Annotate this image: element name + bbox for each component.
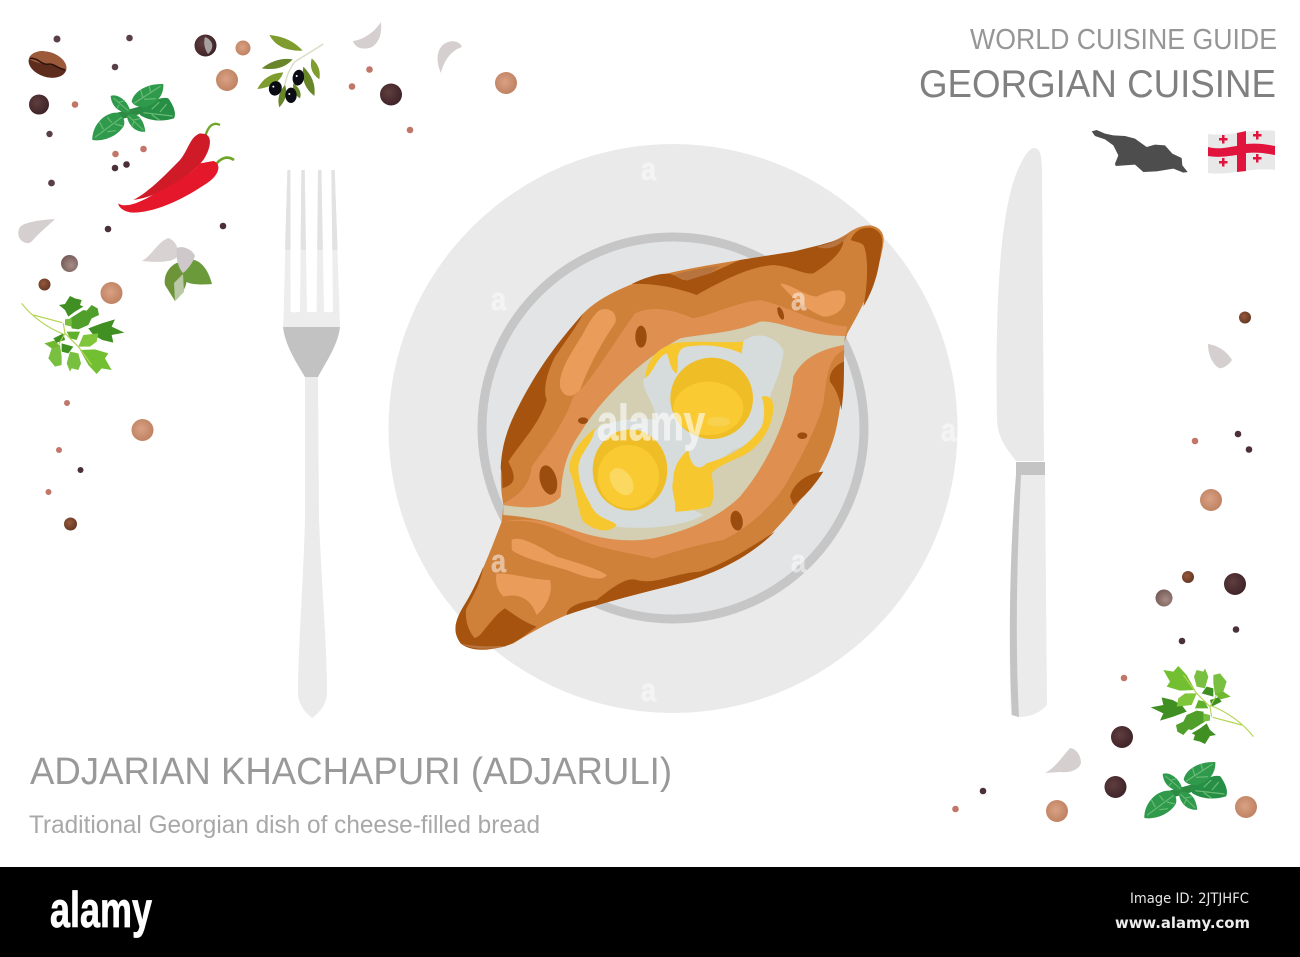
icon: garlic clove, left [18,219,55,243]
website: www.alamy.com [1115,914,1250,932]
highlight patches [496,283,846,615]
guide heading: WORLD CUISINE GUIDE [970,24,1277,56]
map of Georgia [1092,130,1188,173]
icon: chili peppers [118,124,234,213]
flag of Georgia [1208,130,1275,174]
plate [388,144,958,713]
footer bar [0,867,1300,957]
watermark: alamy marks: a [491,281,506,317]
browned crust patches [455,228,882,650]
watermark: alamy marks: a [791,543,806,579]
egg yolk right [670,358,753,439]
dish: adjarian khachapuri [455,225,884,650]
egg white [577,335,783,528]
icon: garlic clove [1208,344,1232,368]
icon: bay leaves with garlic [142,238,212,301]
icon: parsley [1151,666,1253,744]
icon: mint [1144,762,1227,818]
icon: mint [92,84,175,140]
icon: olive branch [257,35,323,107]
peppercorns [349,66,517,133]
spices: lower-left peppercorns [46,400,154,530]
alamy logo: alamy [50,882,152,938]
icon: garlic clove [1045,748,1081,773]
knife [997,148,1047,717]
egg yolk left [593,429,667,511]
melted cheese [503,322,845,540]
watermark: alamy marks: a [791,281,806,317]
watermark: alamy marks: a [641,672,656,708]
peppercorns [29,34,250,304]
icon: garlic clove [353,22,381,49]
title block: top right [919,24,1277,106]
spices: top-centre cluster [349,22,517,133]
icon: parsley [22,296,124,374]
fork [283,170,340,718]
spices: right-side cluster [952,312,1257,822]
image id: Image ID: 2JTJHFC [1130,891,1249,907]
watermark: alamy marks: a [491,543,506,579]
yolk drips [569,342,773,530]
icon: coffee bean [25,47,70,82]
bread crust [455,225,884,649]
crust rim [461,234,848,649]
peppercorns [952,312,1257,822]
lighter crust band [503,300,847,558]
dish title: ADJARIAN KHACHAPURI (ADJARULI) [30,751,672,793]
dish description: Traditional Georgian dish of cheese-filled bread [29,811,540,839]
watermark: alamy marks: alamy [597,395,705,451]
cuisine heading: GEORGIAN CUISINE [919,63,1276,106]
spices: top-left cluster [18,34,323,374]
icon: garlic clove [438,41,462,73]
watermark: alamy marks: a [941,412,956,448]
watermark: alamy marks: a [641,151,656,187]
watermark: alamy marks [491,151,956,708]
crust holes [536,306,807,532]
